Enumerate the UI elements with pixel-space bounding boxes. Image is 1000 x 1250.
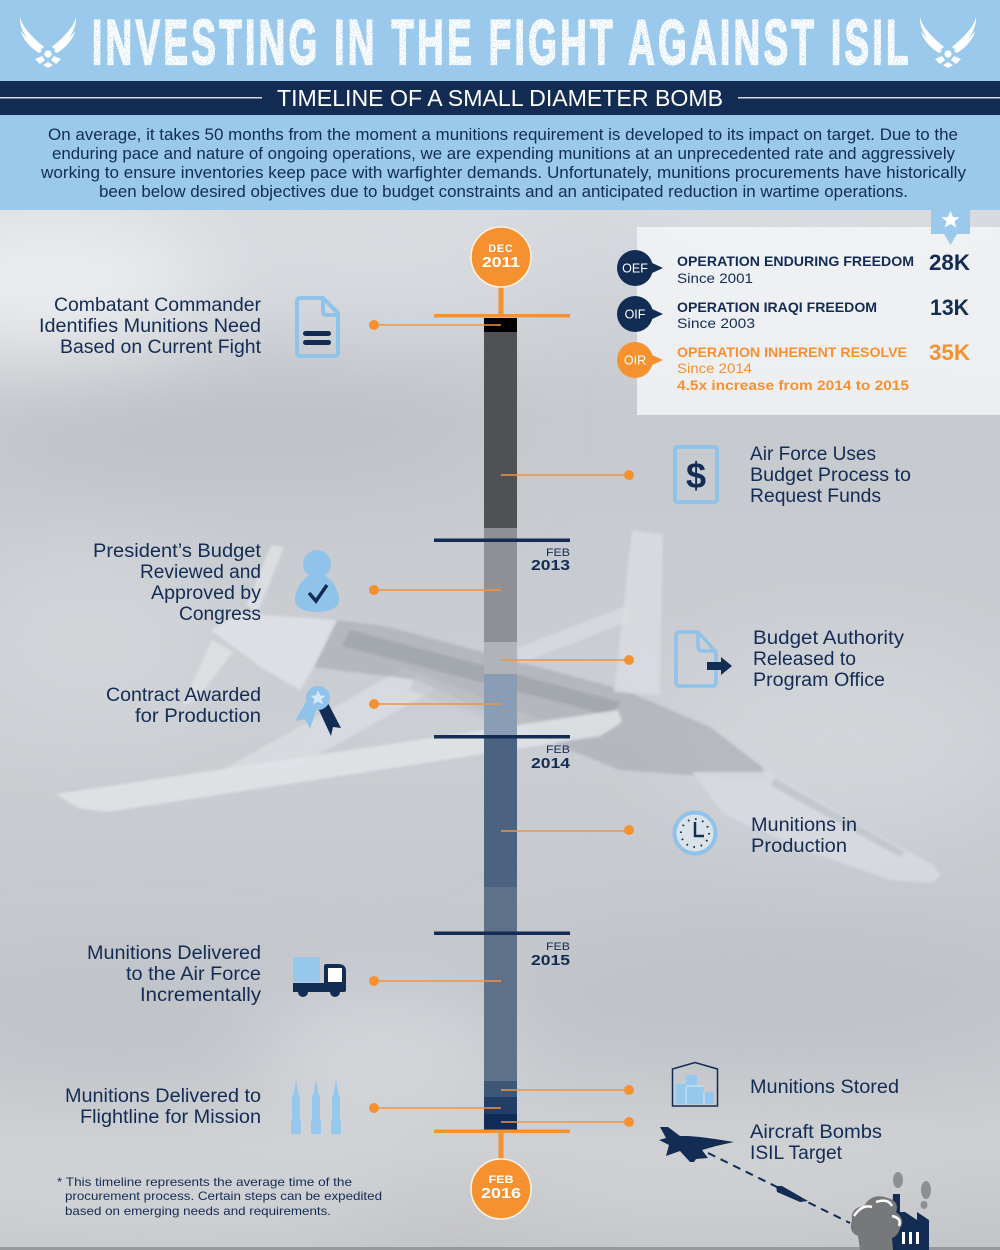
intro paragraph	[0, 115, 1000, 210]
operation enduring freedom: OPERATION ENDURING FREEDOM	[677, 253, 914, 269]
bomb panel	[410, 672, 540, 730]
step: munitions delivered to flightline: Flightline for Mission	[80, 1107, 261, 1128]
intro paragraph: been below desired objectives due to budget constraints and an anticipated reduction in wartime operations.	[99, 183, 908, 201]
operation inherent resolve: 4.5x increase from 2014 to 2015	[677, 377, 909, 393]
icon: document with arrow	[676, 632, 732, 686]
operation inherent resolve: 35K	[929, 340, 970, 365]
icon: fighter jet	[659, 1127, 734, 1162]
marker: Dec 2011 start: DEC	[488, 243, 514, 255]
subtitle bar: TIMELINE OF A SMALL DIAMETER BOMB	[277, 85, 723, 111]
intro paragraph: On average, it takes 50 months from the moment a munitions requirement is developed to its impact on target. Due to the	[48, 126, 958, 144]
step: munitions delivered: to the Air Force	[126, 964, 261, 985]
step: munitions delivered to flightline: Munitions Delivered to	[65, 1086, 261, 1107]
marker: Feb 2016 end: FEB	[488, 1174, 514, 1186]
step: president's budget: Reviewed and	[140, 562, 261, 583]
step: contract awarded: for Production	[135, 706, 261, 727]
bomb strut	[517, 605, 628, 665]
step: budget authority	[753, 628, 905, 691]
icon: truck	[293, 957, 346, 997]
timeline bar	[484, 318, 517, 1130]
icon: dollar	[675, 447, 717, 502]
step: combatant commander	[39, 295, 262, 358]
operation enduring freedom	[617, 250, 970, 286]
step: aircraft bombs target: Aircraft Bombs	[750, 1122, 882, 1143]
icon: dollar: $	[686, 455, 706, 496]
step: budget authority: Released to	[753, 649, 856, 670]
operation inherent resolve: Since 2014	[677, 360, 752, 376]
step: president's budget: Approved by	[151, 583, 262, 604]
step: combatant commander: Identifies Munitions Need	[39, 316, 261, 337]
step: munitions delivered: Incrementally	[140, 985, 262, 1006]
step: air force budget: Budget Process to	[750, 465, 911, 486]
operation enduring freedom: OEF	[622, 262, 648, 276]
icon: clock	[674, 812, 716, 854]
marker: Feb 2014: FEB	[546, 744, 570, 756]
connectors with dots	[369, 320, 634, 1127]
icon: factory explosion	[851, 1172, 931, 1250]
intro paragraph: enduring pace and nature of ongoing operations, we are expending munitions at an unprecedented rate and aggressively	[52, 145, 956, 163]
step: air force budget	[750, 444, 911, 507]
bomb nose	[692, 772, 941, 883]
bomb photograph, faded	[56, 530, 941, 883]
header band	[0, 0, 1000, 81]
operation enduring freedom: 28K	[929, 250, 970, 275]
step: munitions delivered	[87, 943, 262, 1006]
marker: Feb 2016 end: 2016	[481, 1185, 521, 1202]
step: president's budget: Congress	[179, 604, 261, 625]
marker: Feb 2014	[434, 735, 571, 772]
marker: Feb 2015	[434, 932, 570, 969]
marker: Feb 2013: 2013	[531, 557, 570, 574]
bomb upper fin	[246, 545, 284, 612]
operation enduring freedom: Since 2001	[677, 270, 753, 286]
icon: warehouse	[672, 1062, 718, 1106]
intro paragraph: working to ensure inventories keep pace with warfighter demands. Unfortunately, munitions procurements have historically	[40, 164, 967, 182]
icon: document	[297, 298, 338, 356]
marker: Feb 2014: 2014	[531, 755, 571, 772]
icon: air force emblem right	[920, 17, 976, 68]
marker: Feb 2015: 2015	[531, 952, 570, 969]
operation iraqi freedom: Since 2003	[677, 315, 755, 331]
operation inherent resolve: OPERATION INHERENT RESOLVE	[677, 344, 907, 360]
step: munitions in production: Production	[751, 836, 847, 857]
step: air force budget: Air Force Uses	[750, 444, 876, 465]
operation inherent resolve: OIR	[624, 354, 646, 368]
icon: dashed bomb trajectory	[708, 1153, 850, 1223]
icon: approved person	[295, 550, 339, 612]
operation inherent resolve	[617, 340, 970, 393]
icon: star ribbon	[931, 210, 970, 245]
icon: three missiles	[291, 1080, 341, 1134]
step: contract awarded	[106, 685, 261, 727]
operation iraqi freedom: OIF	[625, 308, 646, 322]
marker: Feb 2016 end	[434, 1130, 570, 1219]
marker: Feb 2013: FEB	[546, 547, 570, 559]
bomb vertical fin	[614, 530, 663, 695]
step: contract awarded: Contract Awarded	[106, 685, 261, 706]
bomb dark body	[314, 620, 768, 782]
step: aircraft bombs target: ISIL Target	[750, 1143, 843, 1164]
step: munitions delivered: Munitions Delivered	[87, 943, 261, 964]
operation iraqi freedom: OPERATION IRAQI FREEDOM	[677, 299, 877, 315]
icon: air force emblem left	[20, 17, 76, 68]
bomb left wing	[56, 710, 622, 812]
step: president's budget	[93, 541, 262, 625]
step: munitions stored: Munitions Stored	[750, 1077, 899, 1098]
step: combatant commander: Combatant Commander	[54, 295, 262, 316]
icon: award ribbon	[295, 686, 341, 736]
step: budget authority: Budget Authority	[753, 628, 905, 649]
subtitle bar	[0, 81, 1000, 115]
operation iraqi freedom	[617, 295, 969, 332]
step: aircraft bombs target	[750, 1122, 882, 1164]
step: munitions delivered to flightline	[65, 1086, 261, 1128]
bomb lower fin	[182, 640, 233, 706]
marker: Dec 2011 start: 2011	[482, 254, 520, 271]
bomb rear wing	[222, 667, 442, 770]
operation iraqi freedom: 13K	[930, 295, 969, 320]
footnote	[57, 1175, 382, 1218]
step: munitions in production	[751, 815, 857, 857]
panel: operations statistics	[617, 210, 1000, 415]
step: combatant commander: Based on Current Fight	[60, 337, 262, 358]
step: president's budget: President’s Budget	[93, 541, 262, 562]
footnote: procurement process. Certain steps can be expedited	[65, 1189, 382, 1203]
step: air force budget: Request Funds	[750, 486, 881, 507]
marker: Dec 2011 start	[434, 227, 570, 318]
bomb rear body	[211, 613, 337, 690]
step: budget authority: Program Office	[753, 670, 885, 691]
marker: Feb 2013	[434, 538, 570, 574]
marker: Feb 2015: FEB	[546, 941, 570, 953]
step: munitions in production: Munitions in	[751, 815, 857, 836]
footnote: based on emerging needs and requirements.	[65, 1204, 331, 1218]
footnote: * This timeline represents the average time of the	[57, 1175, 352, 1189]
